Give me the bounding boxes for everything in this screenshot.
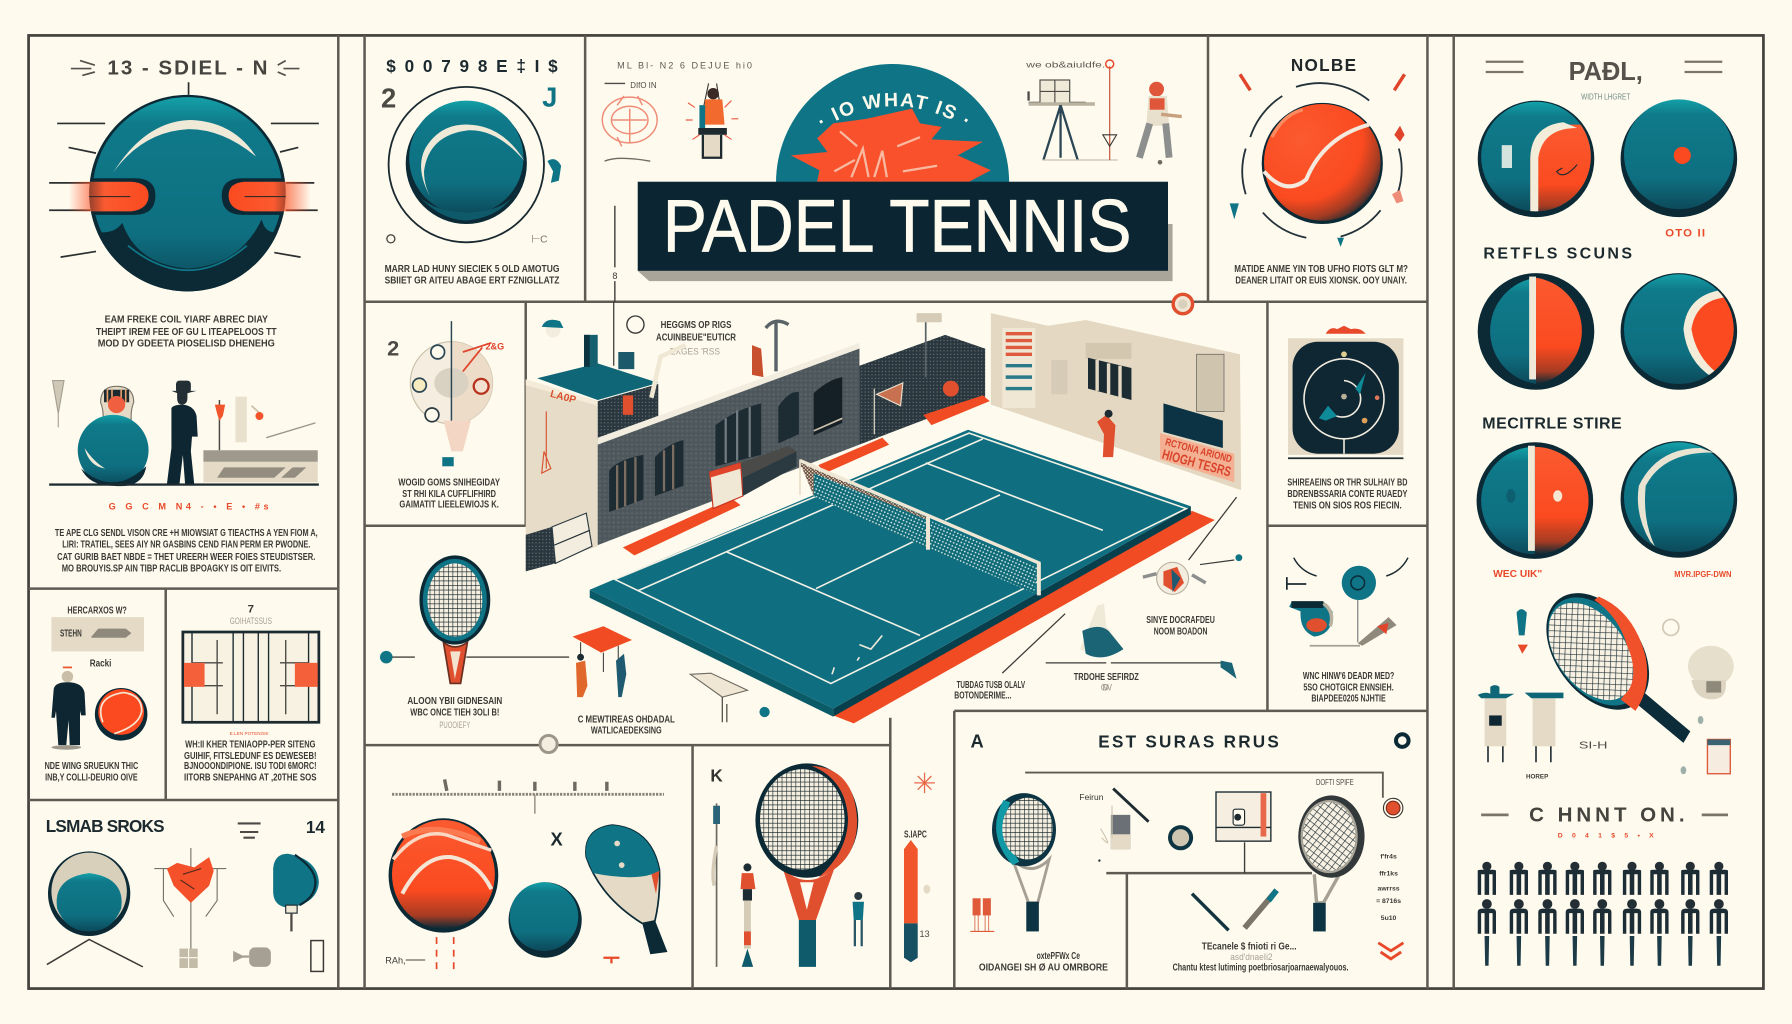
heading: EST SURAS RRUS (1098, 731, 1279, 751)
orange ball with seam (1262, 103, 1383, 224)
racket (755, 763, 858, 967)
right column (1477, 56, 1743, 966)
text block (385, 264, 559, 286)
framed diagram (1216, 792, 1271, 841)
text block: body one: THEIPT IREM FEE OF GU L ITEAPELOOS TT (96, 327, 277, 338)
text block (1287, 478, 1408, 512)
text block: BJNOOONDIPIONE. ISU TODI 6MORC! (184, 761, 317, 772)
small heading and sign: STEHN (60, 629, 82, 640)
text block: NDE WING SRUEUKN THIC (45, 761, 139, 772)
racket two (1298, 795, 1365, 931)
standing player (1139, 82, 1182, 165)
title banner (638, 182, 1168, 271)
teal paddle (586, 825, 667, 954)
text block: C MEWTIREAS OHDADAL (578, 714, 675, 725)
ball: teal with orange cap (1621, 273, 1743, 390)
timeline (392, 779, 664, 814)
heading: NOLBE (1291, 55, 1356, 75)
court marks (832, 635, 882, 674)
panel: small strokes (46, 816, 325, 971)
text block: SBIIET GR AITEU ABAGE ERT FZNIGLLATZ (385, 275, 559, 286)
text blocks: asd'dnaeIi2 (1230, 952, 1273, 962)
small heading and sign: Racki (90, 658, 112, 669)
orange ball (95, 688, 147, 741)
panel: wheel diagram: 2 (387, 335, 399, 360)
central caption: EXGES 'RSS (670, 346, 720, 356)
icon: cap head (542, 320, 563, 338)
subheading: RETFLS SCUNS (1483, 245, 1632, 262)
small icons around ball (1230, 126, 1405, 247)
text block: 5SO CHOTGICR ENNSIEH. (1303, 682, 1394, 693)
text blocks: OIDANGEI SH Ø AU OMRBORE (979, 962, 1108, 973)
umpire chairs (1478, 685, 1607, 780)
panel: big racket (710, 763, 864, 967)
subheading: GOIHATSSUS (230, 616, 272, 626)
text block (954, 672, 1139, 701)
players and stick (713, 803, 864, 967)
text blocks: TEcanele $ fnioti ri Ge... (1202, 942, 1297, 953)
label and marks: RAh, (385, 955, 406, 965)
panel: court diagram: 7 (248, 604, 254, 616)
text blocks: Chantu ktest lutiming poetbriosarjoarnaewalyouos. (1173, 962, 1349, 973)
accessories (1517, 609, 1734, 774)
text block: NOOM BOADON (1154, 626, 1207, 637)
text block: ST RHI KILA CUFFLIFHIRD (402, 489, 496, 500)
main title: PADEL TENNIS (663, 184, 1131, 267)
label and marks (385, 937, 619, 971)
bottles (970, 898, 994, 931)
panel: radar target (1287, 326, 1408, 512)
radar dial (1288, 338, 1403, 458)
text block: GDW (1101, 682, 1112, 692)
central caption (614, 302, 736, 366)
player figure (51, 667, 86, 750)
text block: SINYE DOCRAFDEU (1146, 615, 1215, 626)
text blocks: oxtePFWx Ce (1037, 951, 1080, 962)
text block: body two: LIRI: TRATIEL, SEES AIY NR GASBINS CEND FIAN PERM ER PWODNE. (62, 539, 310, 550)
text block (45, 761, 139, 784)
panel: racket comparison (970, 730, 1409, 973)
text block: BIAPDEE0205 NJHTIE (1311, 694, 1386, 705)
text block: MATIDE ANME YIN TOB UFHO FIOTS GLT M? (1234, 264, 1408, 275)
panel: court diagram (183, 604, 319, 784)
pencil: 13 (919, 929, 930, 939)
text block: body one: MOD DY GDEETA PIOSELISD DHENEHG (98, 338, 275, 349)
text block: WNC HINW'6 DEADR MED? (1303, 671, 1394, 682)
text block (1234, 264, 1408, 286)
small side labels: f'fr4s (1380, 853, 1397, 860)
umpire chairs: SI-H (1579, 741, 1607, 752)
text block (184, 739, 317, 784)
panel heading: $ 0 0 7 9 8 E ‡ I $ (386, 56, 558, 76)
text block: WH:II KHER TENIAOPP-PER SITENG (185, 739, 315, 750)
orange strips along wall (623, 395, 990, 555)
left small captions: DIfO IN (630, 81, 657, 90)
number two: 2 (381, 82, 396, 113)
ball: half and half (1478, 273, 1594, 390)
red chevrons (1378, 943, 1403, 959)
pens (1192, 890, 1277, 930)
racket (419, 555, 490, 683)
big teal ball with orange grips (49, 82, 319, 291)
umpire chairs: HOREP (1526, 773, 1548, 780)
ball: teal with dot (1621, 99, 1737, 217)
teal dome with what is: · IO WHAT IS · (819, 92, 968, 124)
text block: body two: TE APE CLG SENDL VISON CRE +H MIOWSIAT G TIEACTHS A YEN FIOM A, (55, 528, 318, 539)
sun icon (914, 773, 935, 793)
icon: red brain (602, 96, 657, 146)
text block: SHIREAEINS OR THR SULHAIY BD (1287, 478, 1407, 489)
left small captions (605, 61, 752, 161)
red label row: G G C M N4 - • E • #s (109, 502, 269, 512)
text blocks (979, 942, 1349, 973)
dark gray wall (598, 335, 985, 545)
bench kiosk (710, 446, 797, 509)
letter k: K (710, 766, 723, 786)
heading (971, 730, 1409, 751)
text block: GAIMATIT LIEELEWIOJS K. (399, 499, 499, 510)
heading: chnnt on (1481, 804, 1728, 840)
letter x: X (550, 829, 563, 850)
court lines (615, 433, 1186, 683)
sketch group (1287, 558, 1408, 646)
tennis net (800, 459, 1040, 595)
panel: ball detail (381, 56, 561, 286)
teal paddle object (273, 854, 319, 931)
panel: title hero (602, 59, 1182, 302)
narrow panel: pencil gauge (904, 773, 935, 962)
red labels (1493, 569, 1732, 580)
panel: scout and player (45, 606, 147, 784)
left vertical marker: 8 (612, 271, 617, 281)
connector ring (540, 735, 557, 753)
gear cluster (1002, 497, 1242, 673)
text block: INB,Y COLLI-DEURIO OIVE (45, 773, 138, 784)
heading: A (971, 730, 984, 751)
left small captions: ML Bl- N2 6 DEJUE hi0 (617, 61, 752, 71)
orange-rim racket (1525, 574, 1690, 743)
small pad on stand (690, 673, 770, 722)
heading (1486, 56, 1722, 101)
orange ball (389, 818, 498, 933)
heading: WIDTH LHGRET (1581, 92, 1630, 101)
text block: body two: CAT GURIB BAET NBDE = THET UREERH WEER FOIES STEUDISTSER. (57, 552, 316, 563)
text block: WOGID GOMS SNIHEGIDAY (398, 478, 500, 489)
ball: teal with arc (1621, 441, 1737, 558)
text block: TUBDAG TUSB OLALV (957, 680, 1025, 691)
small heading and sign (51, 606, 144, 669)
small side labels (1376, 853, 1401, 922)
text block: PUOOIEFY (439, 720, 470, 730)
isometric court scene (526, 313, 1241, 723)
red labels: MVR.IPGF-DWN (1674, 570, 1732, 579)
pencil (904, 840, 930, 962)
panel 1 heading: 13 - SDIEL - N (107, 56, 267, 79)
small side labels: awrrss (1378, 885, 1400, 892)
tools (1098, 789, 1193, 862)
panel: racket and people (380, 555, 770, 753)
connector ring (1173, 294, 1193, 314)
text block: WBC ONCE TIEH 3OLI B! (410, 707, 499, 718)
title banner shadow (638, 224, 1173, 281)
central caption: ACUINBEUE"EUTICR (656, 333, 736, 344)
dark broken ring (1242, 83, 1402, 238)
text block: body one (96, 314, 277, 349)
text block (407, 696, 502, 730)
icon: teal splash (380, 651, 393, 663)
teal ball (48, 851, 130, 936)
court surface (590, 430, 1191, 709)
ball: half and half glossy (1477, 442, 1593, 559)
heading: chnnt on: C HNNT ON. (1529, 804, 1685, 827)
text block: TRDOHE SEFIRDZ (1074, 672, 1139, 683)
tiny tool glyph: ⊢C (531, 234, 548, 245)
text block: IITORB SNEPAHNG AT ,20THE SOS (184, 773, 317, 784)
orange table with players (573, 626, 632, 697)
heading: 14 (306, 817, 325, 837)
small side labels: = 8716s (1376, 898, 1401, 905)
red label: OTO II (1665, 228, 1706, 240)
small teal icon (547, 159, 561, 183)
icon: teal tool (1221, 661, 1237, 679)
people grid (1478, 862, 1728, 966)
text block: GUIHIF, FITSLEDUNF ES DEWESEB! (184, 751, 317, 762)
right caption: we ob&aiuldfe.. (1025, 60, 1109, 69)
text block: body one: EAM FREKE COIL YIARF ABREC DIAY (105, 314, 268, 325)
teal letter: J (542, 81, 557, 112)
central caption: HEGGMS OP RIGS (661, 320, 732, 331)
lamps and rooftop figures (651, 313, 942, 398)
text block: TENIS ON SIOS ROS FIECIN. (1293, 501, 1402, 512)
orange heart diagram (154, 848, 226, 960)
seated umpire figure (686, 83, 738, 158)
text block (1146, 615, 1215, 637)
text block: MARR LAD HUNY SIECIEK 5 OLD AMOTUG (385, 264, 559, 275)
left building (526, 335, 658, 571)
heading: LSMAB SROKS (46, 816, 165, 836)
illustration: ball, person and court (49, 381, 319, 486)
red labels: WEC UIK" (1493, 569, 1542, 580)
wheel diagram: 2&G (485, 342, 504, 352)
heading: chnnt on: D 0 4 1 $ 5 • X (1558, 833, 1654, 840)
small teal ball (509, 882, 582, 958)
text block: WATLICAEDEKSING (591, 726, 662, 737)
subheading: MECITRLE STIRE (1482, 416, 1622, 433)
small label: DOFTI SPIFE (1316, 778, 1354, 787)
text block: body two: MO BROUYIS.SP AIN TIBP RACLIB BPOAGKY IS OIT EIVITS. (62, 563, 281, 574)
text block (1303, 671, 1394, 705)
small label: Feirun (1079, 793, 1103, 802)
court side faces (590, 590, 833, 717)
callouts right of court (954, 497, 1242, 701)
small ring (387, 235, 395, 243)
ringed teal ball (389, 87, 544, 242)
panel: left intro (49, 56, 319, 574)
panel: ball and paddle (385, 779, 667, 971)
text block: DEANER LITAIT OR EUIS XIONSK. OOY UNAIY. (1235, 275, 1407, 286)
teal dome with what is (776, 64, 1010, 182)
orange court border (833, 511, 1215, 723)
small side labels: ffr1ks (1379, 870, 1398, 877)
connector line (384, 656, 569, 658)
ball: teal with orange panel (1478, 101, 1600, 217)
small side labels: 5u10 (1381, 915, 1397, 922)
panel: equipment sketch (1287, 558, 1408, 705)
text block: BOTONDERIME... (954, 690, 1012, 701)
racket one (992, 793, 1056, 931)
red ticks (1240, 74, 1405, 90)
text block (398, 478, 500, 510)
court plan (183, 632, 319, 722)
wheel diagram (410, 321, 504, 466)
heading: PAÐL, (1569, 56, 1643, 86)
teal cone (1080, 603, 1123, 657)
left vertical marker (612, 206, 617, 302)
small icons row (47, 939, 323, 971)
right back wall (991, 313, 1241, 490)
easel and tower (1029, 60, 1118, 160)
text block: ALOON YBII GIDNESAIN (407, 696, 502, 707)
right back wall: RCTONA ARIOND (1164, 437, 1233, 465)
heading (46, 816, 325, 838)
small red caption: E.LEN POTENOIK (230, 731, 269, 736)
left building: LA0P (549, 389, 577, 406)
right back wall: HIOGH TESRS (1160, 447, 1233, 479)
red label (1326, 326, 1366, 334)
panel: orange ball detail (1230, 55, 1408, 286)
panel: wheel diagram (387, 320, 563, 510)
starburst (791, 109, 991, 182)
text block: BDRENBSSARIA CONTE RUAEDY (1287, 489, 1408, 500)
label: S.IAPC (904, 830, 927, 841)
small heading and sign: HERCARXOS W? (67, 606, 127, 617)
text block: body two (55, 528, 318, 574)
ring (1383, 798, 1403, 818)
text block (578, 714, 675, 737)
